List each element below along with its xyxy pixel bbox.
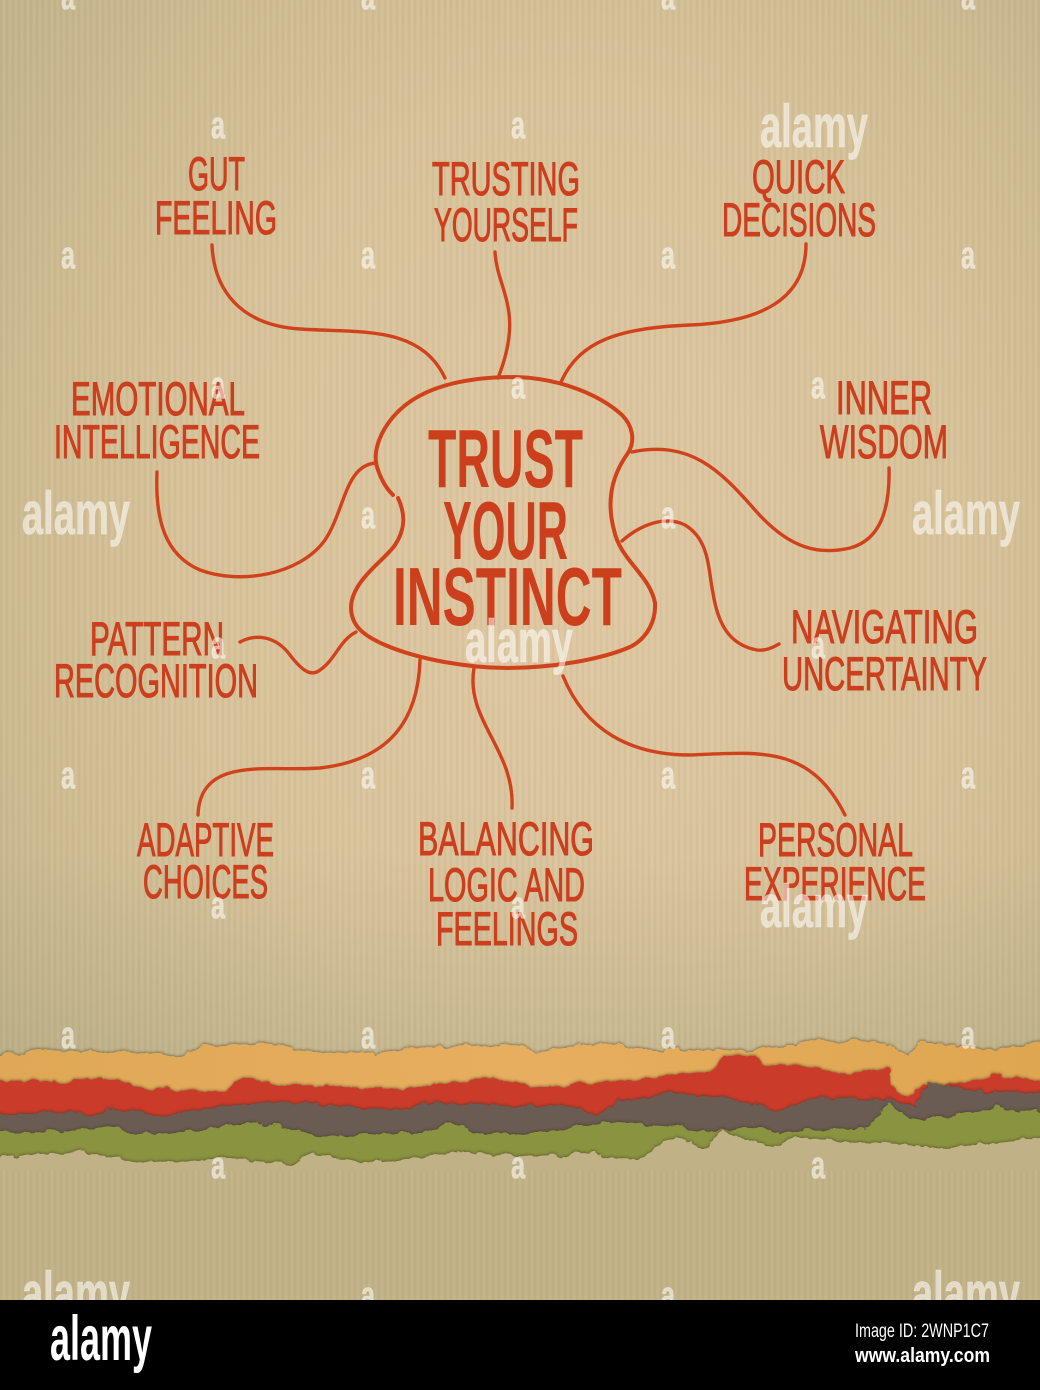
watermarks: a bbox=[811, 365, 826, 407]
label: quick decisions: DECISIONS bbox=[722, 193, 876, 246]
label: emotional intelligence: EMOTIONAL bbox=[71, 372, 245, 425]
watermarks: a bbox=[361, 1275, 376, 1317]
watermarks: a bbox=[511, 105, 526, 147]
watermarks: a bbox=[211, 365, 226, 407]
watermarks: a bbox=[661, 755, 676, 797]
label: quick decisions: QUICK bbox=[752, 150, 845, 203]
label: trusting yourself: YOURSELF bbox=[434, 198, 578, 251]
watermarks: alamy bbox=[22, 480, 130, 547]
watermarks: a bbox=[211, 885, 226, 927]
label: adaptive choices: ADAPTIVE bbox=[137, 813, 274, 866]
torn paper strips bbox=[0, 1040, 1040, 1320]
watermarks: a bbox=[211, 1145, 226, 1187]
label: quick decisions bbox=[722, 150, 876, 246]
watermarks: a bbox=[61, 755, 76, 797]
strip: red paper bbox=[0, 1055, 1040, 1130]
title: trust your instinct: INSTINCT bbox=[393, 550, 622, 643]
label: balancing logic and feelings: FEELINGS bbox=[436, 902, 578, 955]
watermarks: a bbox=[661, 235, 676, 277]
central blob outline bbox=[351, 377, 655, 668]
watermarks: a bbox=[811, 625, 826, 667]
title: trust your instinct: YOUR bbox=[443, 484, 568, 577]
watermarks: a bbox=[511, 1145, 526, 1187]
watermarks: a bbox=[361, 1015, 376, 1057]
watermarks: a bbox=[961, 1015, 976, 1057]
label: personal experience: EXPERIENCE bbox=[744, 857, 926, 910]
watermarks: alamy bbox=[22, 1260, 130, 1327]
title: trust your instinct bbox=[393, 412, 622, 643]
watermarks: a bbox=[361, 755, 376, 797]
watermarks: a bbox=[61, 235, 76, 277]
label: gut feeling: FEELING bbox=[155, 191, 277, 244]
watermarks: a bbox=[511, 365, 526, 407]
footer logo: alamy bbox=[50, 1304, 152, 1374]
watermarks: alamy bbox=[465, 608, 573, 675]
watermarks: a bbox=[961, 755, 976, 797]
label: gut feeling: GUT bbox=[188, 147, 245, 200]
strip: grey paper bbox=[0, 1083, 1040, 1150]
label: balancing logic and feelings: BALANCING bbox=[418, 812, 594, 865]
label: inner wisdom bbox=[820, 371, 948, 468]
watermarks: alamy bbox=[760, 873, 868, 940]
watermarks: a bbox=[961, 235, 976, 277]
label: inner wisdom: INNER bbox=[836, 371, 932, 424]
label: trusting yourself: TRUSTING bbox=[432, 152, 580, 205]
mind map connectors bbox=[157, 244, 889, 815]
strip: green paper bbox=[0, 1102, 1040, 1170]
strip: orange paper bbox=[0, 1040, 1040, 1120]
watermarks: a bbox=[661, 495, 676, 537]
watermarks: a bbox=[811, 1145, 826, 1187]
watermarks: a bbox=[511, 885, 526, 927]
label: navigating uncertainty bbox=[782, 600, 987, 700]
website: www.alamy.com bbox=[854, 1345, 990, 1367]
label: personal experience bbox=[744, 813, 926, 910]
title: trust your instinct: TRUST bbox=[428, 412, 583, 505]
watermarks: a bbox=[61, 1015, 76, 1057]
image id: Image ID: 2WNP1C7 bbox=[855, 1321, 989, 1342]
watermarks: a bbox=[361, 495, 376, 537]
label: pattern recognition: RECOGNITION bbox=[54, 654, 258, 707]
watermarks: alamy bbox=[760, 93, 868, 160]
label: emotional intelligence bbox=[54, 372, 260, 468]
watermarks: a bbox=[211, 625, 226, 667]
watermarks: a bbox=[211, 105, 226, 147]
label: pattern recognition bbox=[54, 612, 258, 707]
label: adaptive choices: CHOICES bbox=[143, 855, 268, 908]
watermarks: a bbox=[661, 1015, 676, 1057]
label: adaptive choices bbox=[137, 813, 274, 908]
label: emotional intelligence: INTELLIGENCE bbox=[54, 415, 260, 468]
watermarks: a bbox=[361, 235, 376, 277]
label: inner wisdom: WISDOM bbox=[820, 415, 948, 468]
label: balancing logic and feelings: LOGIC AND bbox=[428, 858, 585, 911]
label: balancing logic and feelings bbox=[418, 812, 594, 955]
footer bar bbox=[0, 1300, 1040, 1390]
label: gut feeling bbox=[155, 147, 277, 244]
strip: lower beige paper bbox=[0, 1132, 1040, 1320]
watermarks: a bbox=[661, 1275, 676, 1317]
label: personal experience: PERSONAL bbox=[758, 813, 913, 866]
label: trusting yourself bbox=[432, 152, 580, 251]
label: pattern recognition: PATTERN bbox=[90, 612, 224, 665]
